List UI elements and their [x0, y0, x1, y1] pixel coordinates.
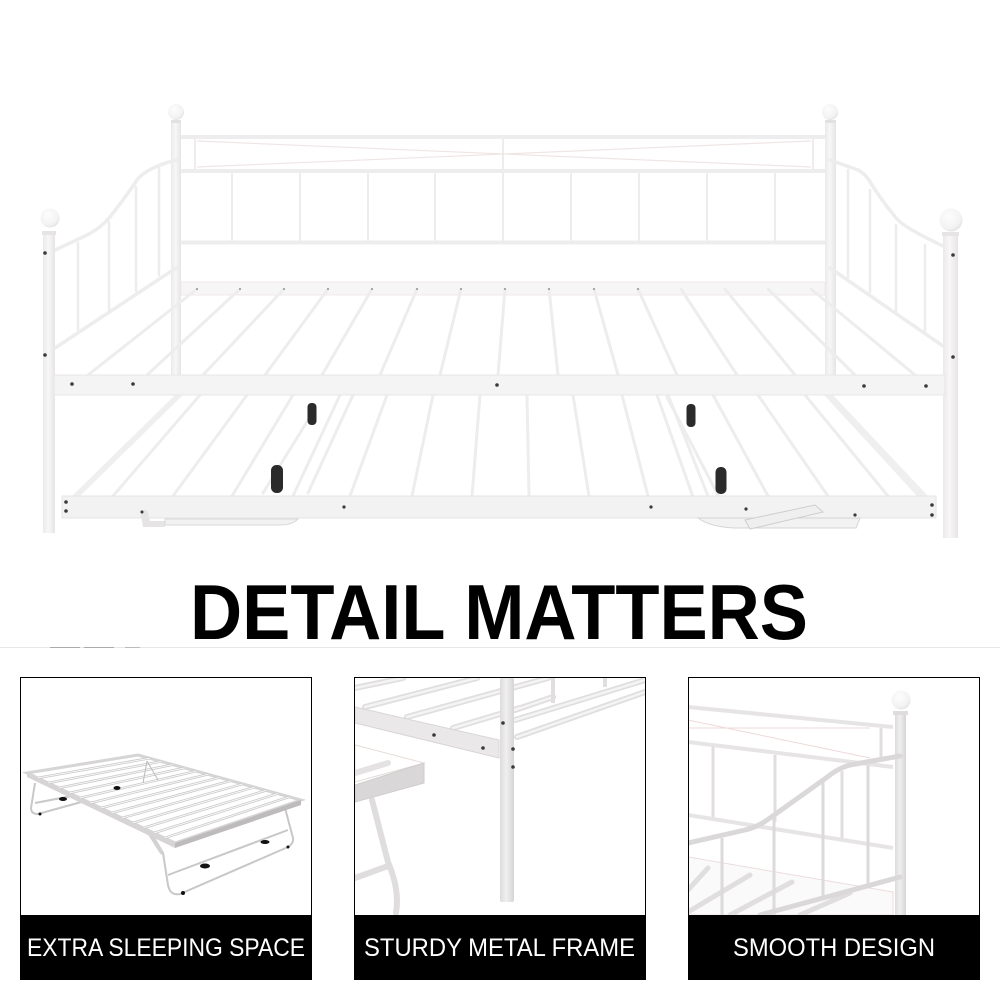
front posts with ball finials — [40, 208, 962, 538]
panel: extra sleeping space — [20, 678, 312, 980]
main product image: daybed with trundle — [40, 104, 962, 538]
slat rivets — [196, 288, 639, 290]
trundle front rail with bolts — [62, 496, 936, 518]
rear posts with ball finials — [168, 104, 838, 375]
right folding bracket — [698, 505, 860, 529]
caption: SMOOTH DESIGN — [733, 934, 935, 962]
panel: smooth design — [688, 678, 980, 980]
caption bar — [354, 915, 646, 980]
front rail with bolts — [43, 251, 955, 395]
left pull handle bracket — [140, 510, 298, 527]
caster wheels — [271, 403, 726, 494]
right side arm — [830, 160, 943, 346]
caption bar — [688, 915, 980, 980]
caption bar — [20, 915, 312, 980]
caption: EXTRA SLEEPING SPACE — [27, 934, 305, 962]
panel: sturdy metal frame — [354, 678, 646, 980]
wheel support bars — [263, 395, 719, 497]
divider strip — [0, 647, 1000, 648]
deck back rail — [181, 282, 825, 295]
headboard back panel — [181, 137, 825, 242]
trundle side rails — [72, 395, 928, 496]
upper deck slats — [88, 289, 915, 375]
caption: STURDY METAL FRAME — [364, 934, 635, 962]
trundle illustration — [27, 755, 301, 895]
left side arm — [55, 160, 176, 348]
arm close-up illustration — [688, 690, 910, 915]
title: DETAIL MATTERS — [190, 568, 808, 656]
frame close-up illustration — [355, 678, 645, 913]
trundle slats — [113, 395, 888, 496]
